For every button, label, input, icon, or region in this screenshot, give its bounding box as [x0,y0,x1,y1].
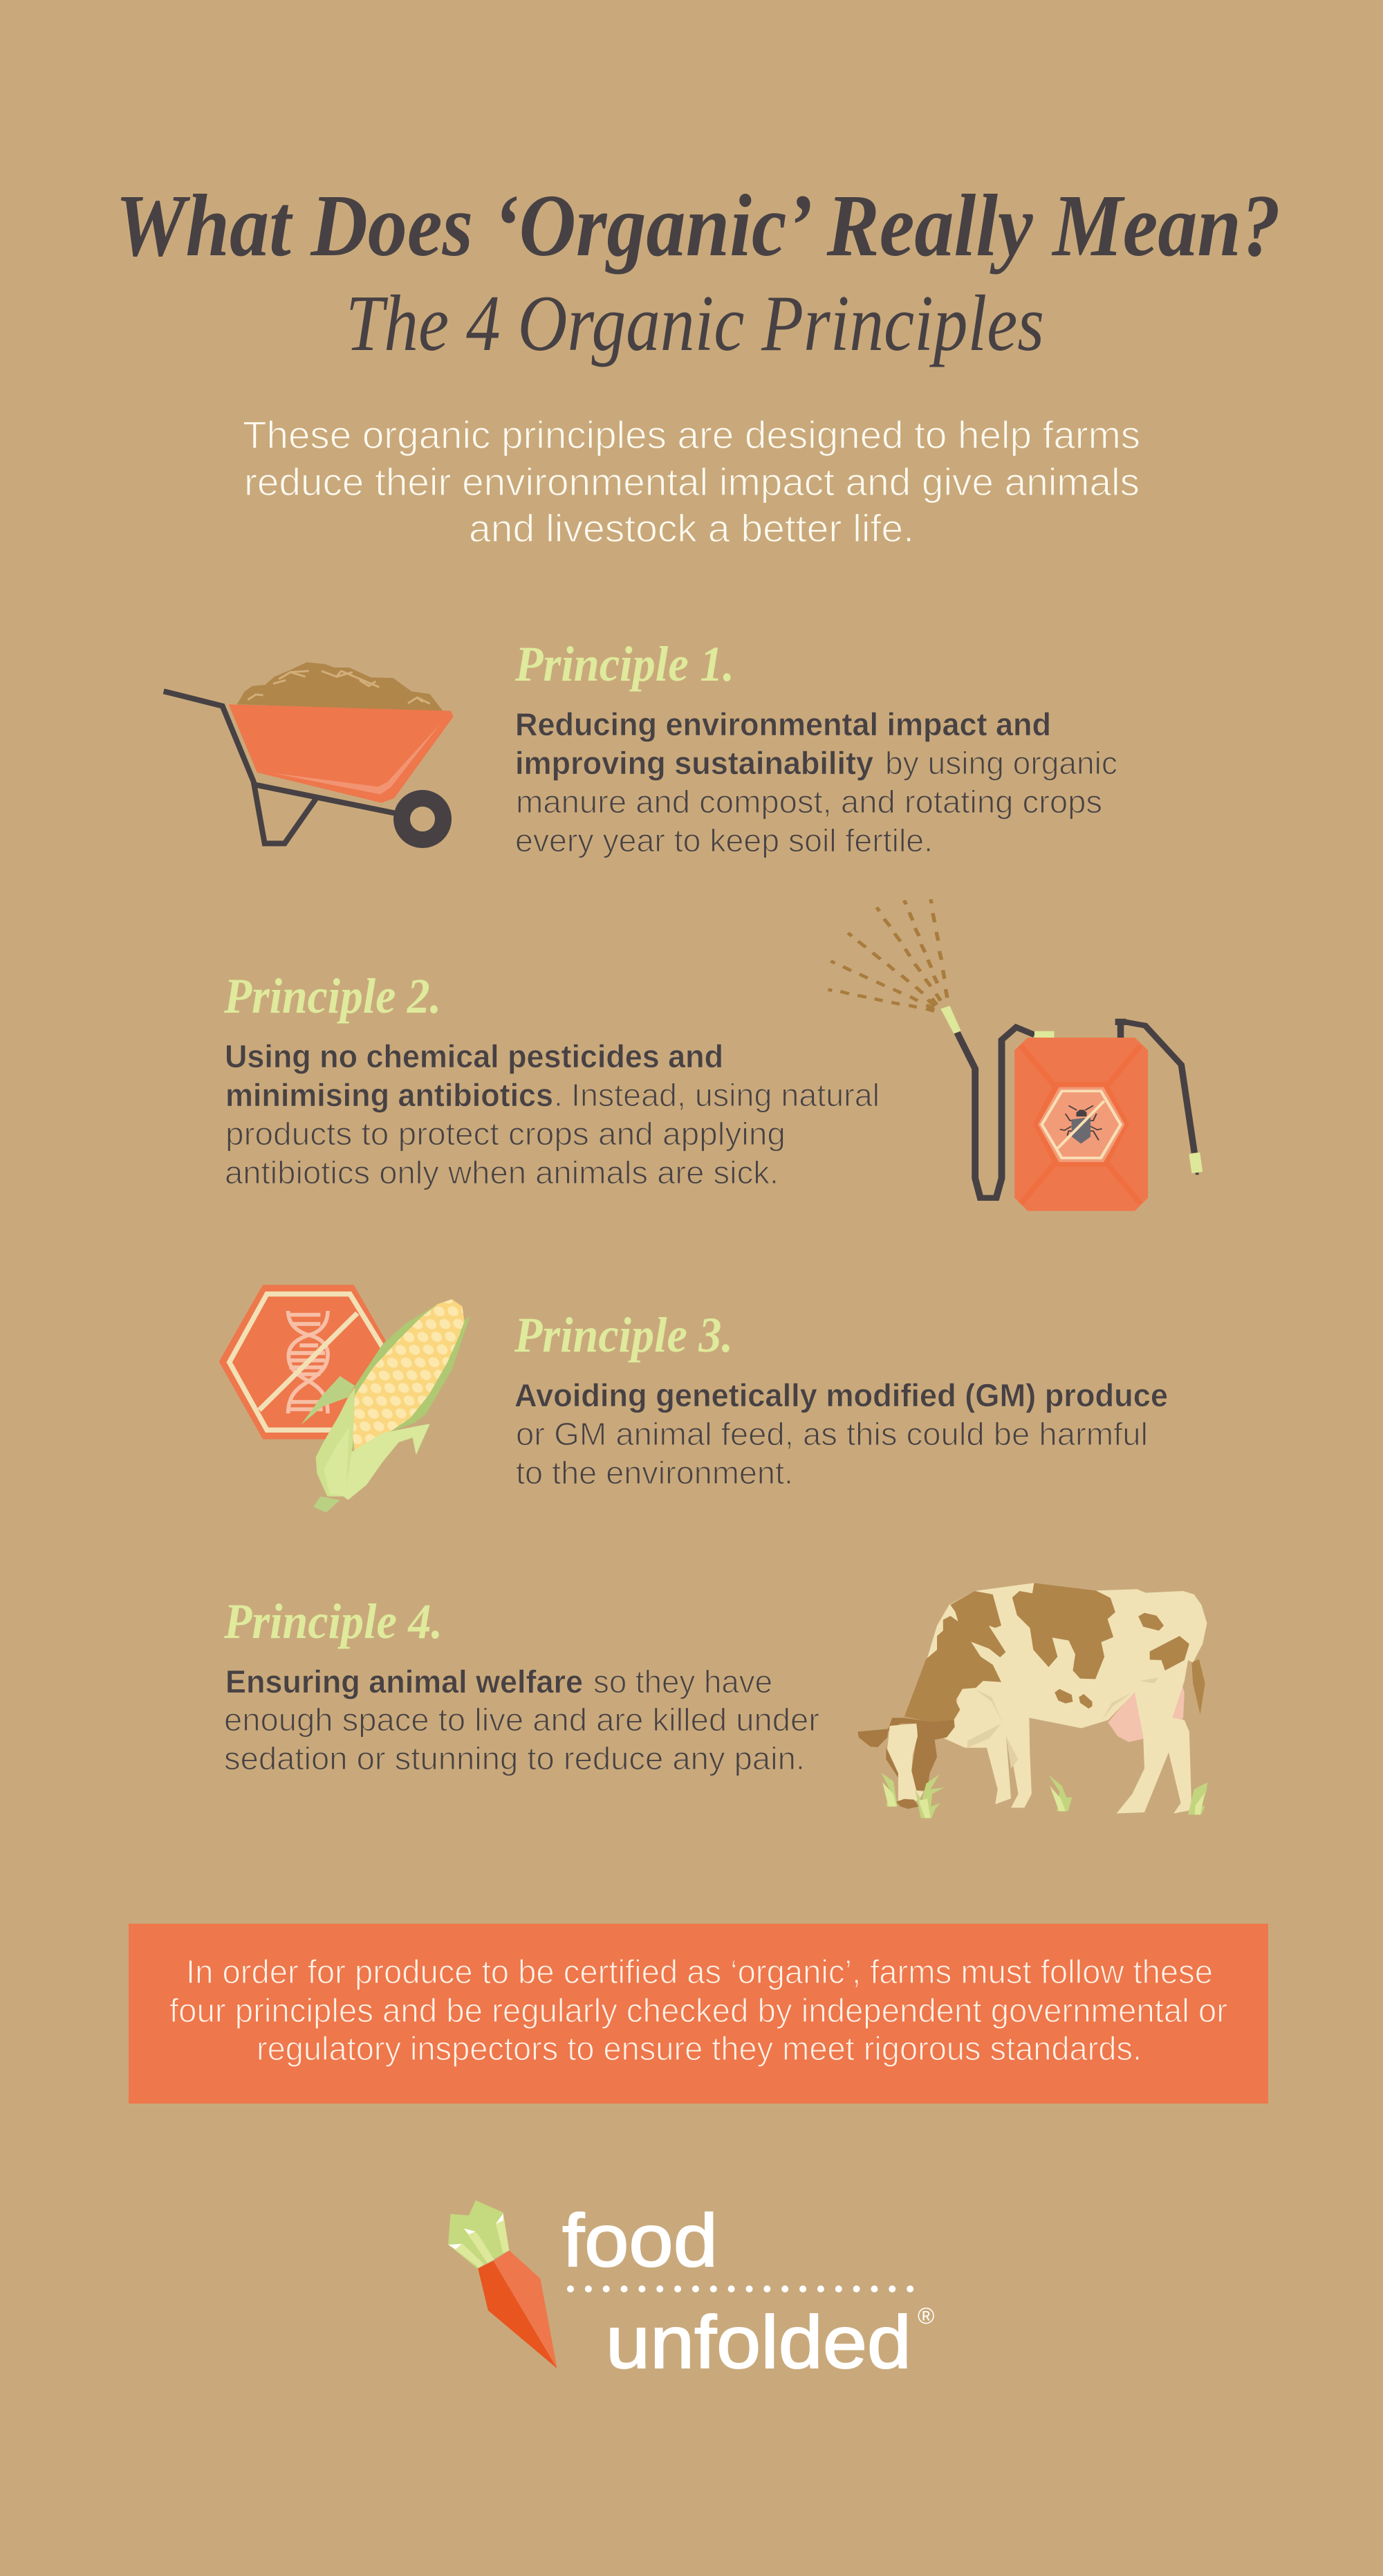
principle 2 text: products to protect crops and applying [225,1116,786,1152]
principle 1 text: improving sustainability [515,745,873,781]
principle 1 text: every year to keep soil fertile. [515,822,933,858]
icon: wheelbarrow [164,662,454,843]
icon: carrot [448,2200,557,2368]
callout [129,1924,1268,2104]
principle 4 text: enough space to live and are killed under [224,1702,819,1738]
subtitle: The 4 Organic Principles [346,279,1044,368]
principle 2 text: . [554,1077,563,1113]
callout: four principles and be regularly checked by independent governmental or [169,1993,1227,2030]
principle 2 text [223,968,880,1190]
wordmark: unfolded: unfolded [606,2300,911,2384]
principle 3 text: to the environment. [516,1455,793,1491]
title: What Does ‘Organic’ Really Mean? [115,176,1281,275]
registered mark: ® [918,2303,934,2328]
icon: no GM hexagon and corn [219,1285,470,1513]
principle 3 text [514,1307,1168,1491]
spray [828,899,947,1011]
principle 4 text: sedation or stunning to reduce any pain. [224,1740,805,1776]
intro text: reduce their environmental impact and give animals [244,460,1140,504]
icon: backpack sprayer [828,899,1203,1211]
principle 1 text [514,636,1117,858]
heading: principle 1: Principle 1. [514,636,734,692]
principle 2 text: Using no chemical pesticides and [225,1038,723,1074]
principle 2 text: Instead, using natural [571,1077,880,1113]
callout: regulatory inspectors to ensure they meet rigorous standards. [257,2031,1142,2068]
intro text: and livestock a better life. [469,506,914,550]
principle 4 text [223,1594,819,1776]
principle 4 text: so they have [593,1664,772,1700]
heading: principle 2: Principle 2. [223,968,441,1024]
heading: principle 4: Principle 4. [223,1594,443,1649]
principle 1 text: by using organic [885,745,1117,781]
heading: principle 3: Principle 3. [514,1307,733,1363]
wordmark: food: food [562,2198,718,2282]
intro text: These organic principles are designed to help farms [243,413,1140,457]
principle 3 text: Avoiding genetically modified (GM) produce [514,1377,1168,1413]
principle 2 text: minimising antibiotics [225,1077,553,1113]
principle 4 text: Ensuring animal welfare [225,1664,583,1700]
intro text [243,413,1140,550]
principle 3 text: or GM animal feed, as this could be harmful [516,1416,1148,1452]
callout: In order for produce to be certified as ‘organic’, farms must follow these [186,1954,1213,1991]
principle 1 text: manure and compost, and rotating crops [516,784,1102,820]
logo: food unfolded [448,2198,934,2384]
icon: grazing cow [857,1583,1207,1818]
principle 1 text: Reducing environmental impact and [515,706,1051,742]
principle 2 text: antibiotics only when animals are sick. [225,1154,779,1190]
dotted divider [570,2285,911,2292]
